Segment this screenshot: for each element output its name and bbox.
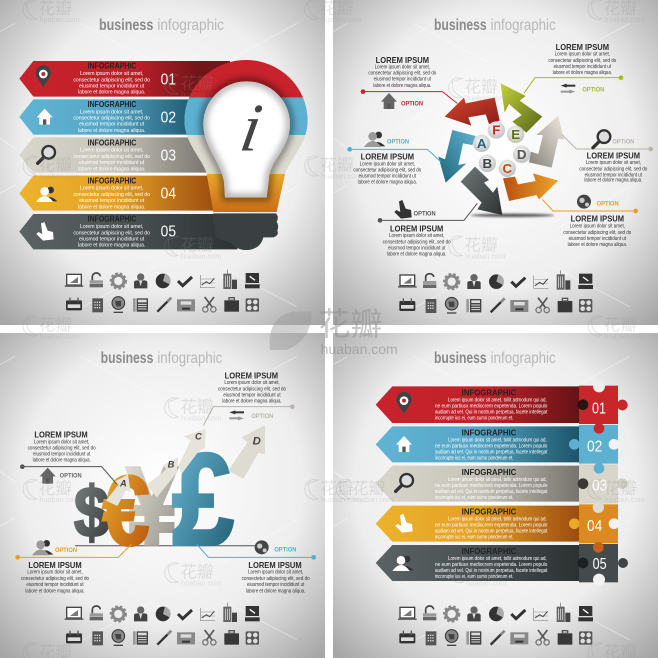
- callout: lower left dark: [378, 200, 477, 258]
- banner 02 blue: incorrupte ius ei, eum sumo ponderum et.: [435, 456, 514, 462]
- callout: top: eiusmod tempor incididunt ut: [223, 392, 281, 398]
- letter balls: C: [503, 161, 513, 176]
- callout: top right green: labore et dolore magna aliqua.: [553, 70, 612, 76]
- callout: lower left dark: LOREM IPSUM: [390, 223, 443, 233]
- callout: lower left: LOREM IPSUM: [28, 560, 82, 570]
- callout: top right green: LOREM IPSUM: [556, 42, 609, 52]
- callout: lower right orange: eiusmod tempor incididunt ut: [569, 236, 626, 242]
- callout: mid left blue: eiusmod tempor incididunt ut: [359, 174, 416, 180]
- callout: left: labore et dolore magna aliqua.: [33, 458, 91, 464]
- panel: currency symbols: [0, 333, 325, 658]
- watermark: centre: [270, 306, 398, 357]
- callout: lower right orange: OPTION: [597, 201, 619, 208]
- callout: lower left: consectetur adipiscing elit, sed do: [21, 576, 89, 582]
- callout: mid right cream: LOREM IPSUM: [587, 150, 640, 160]
- banner 03 grey: INFOGRAPHIC: [462, 468, 517, 477]
- callout: top right green: eiusmod tempor incididunt ut: [554, 64, 611, 70]
- callout: lower right orange: consectetur adipiscing elit, sed do: [563, 230, 631, 236]
- banner 05 dark: labore et dolore magna aliqua.: [78, 243, 146, 249]
- light bulb: [180, 57, 313, 250]
- banner 02 blue: [376, 426, 579, 462]
- callout: lower right: Lorem ipsum dolor sit amet,: [248, 570, 304, 576]
- banner 02 blue: [19, 99, 200, 135]
- watermark: centre: 花瓣: [318, 306, 382, 342]
- callout: lower left dark: eiusmod tempor incididunt ut: [388, 245, 446, 251]
- callout: left: eiusmod tempor incididunt ut: [33, 452, 91, 458]
- banner 05 dark: consectetur adipiscing elit, sed do: [73, 230, 150, 236]
- callout: lower left dark: OPTION: [414, 210, 436, 217]
- puzzle piece 03: [578, 463, 628, 504]
- callout: mid left blue: Lorem ipsum dolor sit amet,: [360, 161, 415, 167]
- panel: puzzle banners: [333, 333, 658, 658]
- icon rows: [65, 270, 260, 313]
- callout: lower left dark: consectetur adipiscing elit, sed do: [383, 239, 451, 245]
- callout: lower right: LOREM IPSUM: [248, 560, 302, 570]
- arrow D: D: [253, 435, 261, 447]
- banner 03 grey: incorrupte ius ei, eum sumo ponderum et.: [435, 495, 514, 501]
- banner 02 blue: eiusmod tempor incididunt ut: [79, 122, 145, 128]
- banner 05 dark: Lorem ipsum dolor sit amet,: [80, 224, 144, 230]
- callout: top: Lorem ipsum dolor sit amet,: [224, 380, 280, 386]
- currency: dollar: $: [74, 472, 109, 552]
- puzzle piece 04: 04: [587, 518, 602, 535]
- callout: left: [20, 430, 117, 484]
- callout: top right green: OPTION: [582, 86, 604, 93]
- banner 03 grey: labore et dolore magna aliqua.: [78, 166, 146, 172]
- callout: top: consectetur adipiscing elit, sed do: [218, 386, 286, 392]
- banner 02 blue: consectetur adipiscing elit, sed do: [73, 116, 150, 122]
- callout: top left red: labore et dolore magna aliqua.: [373, 83, 432, 89]
- banner 04 orange: incorrupte ius ei, eum sumo ponderum et.: [435, 535, 514, 541]
- callout: top left red: eiusmod tempor incididunt ut: [374, 77, 431, 83]
- title: infographic: [491, 17, 556, 34]
- callout: lower right: consectetur adipiscing elit, sed do: [242, 576, 310, 582]
- callout: lower right orange: Lorem ipsum dolor sit amet,: [570, 224, 625, 230]
- puzzle piece 01: 01: [592, 401, 606, 418]
- callout: top left red: LOREM IPSUM: [376, 55, 429, 65]
- banner 05 dark: INFOGRAPHIC: [88, 215, 137, 224]
- ground line: [75, 545, 255, 546]
- puzzle piece 05: 05: [593, 556, 607, 573]
- banner 01 red: incorrupte ius ei, eum sumo ponderum et.: [435, 416, 514, 422]
- banner 02 blue: audiam ad vel. Qui in nostrum perpetua, facete intellegat: [435, 450, 548, 456]
- panel: arrow swirl: [333, 0, 658, 325]
- callout: lower left: labore et dolore magna aliqua.: [25, 588, 85, 594]
- title: infographic: [157, 17, 224, 34]
- banner 04 orange: 04: [161, 186, 176, 203]
- banner 02 blue: labore et dolore magna aliqua.: [78, 128, 146, 134]
- currency: pound: £: [172, 426, 234, 572]
- banner 04 orange: Lorem ipsum dolor sit amet, tollit admodum qui ad,: [448, 517, 547, 523]
- callout: mid left blue: OPTION: [387, 138, 409, 145]
- callout: lower left: Lorem ipsum dolor sit amet,: [27, 570, 83, 576]
- callout: top left red: Lorem ipsum dolor sit amet,: [375, 64, 430, 70]
- callout: mid right cream: eiusmod tempor incididunt ut: [585, 172, 642, 178]
- letter balls: D: [517, 147, 527, 162]
- watermark: centre: huaban.com: [321, 341, 398, 357]
- banner 05 dark: eiusmod tempor incididunt ut: [79, 236, 145, 242]
- letter balls: F: [492, 123, 500, 138]
- callout: top: [203, 371, 295, 426]
- banner 01 red: 01: [161, 71, 176, 88]
- letter balls: E: [511, 127, 520, 142]
- banner 04 orange: ne eum partiusx mediocrem expetenda. Lorem populo: [435, 523, 547, 529]
- currency: euro: €: [103, 455, 149, 565]
- puzzle piece 05: [578, 542, 628, 586]
- banner 01 red: Lorem ipsum dolor sit amet, tollit admodum qui ad,: [448, 398, 547, 404]
- banner 01 red: INFOGRAPHIC: [462, 389, 517, 398]
- callout: top: OPTION: [251, 413, 273, 420]
- puzzle piece 02: 02: [587, 438, 602, 455]
- arrow: green: [501, 83, 542, 133]
- callout: top left red: OPTION: [401, 100, 423, 107]
- banner 05 dark: ne eum partiusx mediocrem expetenda. Lorem populo: [435, 562, 547, 568]
- callout: top right green: Lorem ipsum dolor sit amet,: [555, 52, 610, 58]
- arrow B: [147, 457, 178, 497]
- callout: mid right cream: Lorem ipsum dolor sit amet,: [586, 160, 641, 166]
- puzzle piece 03: 03: [592, 478, 607, 495]
- arrow: blue: [438, 130, 476, 183]
- icon rows: [398, 270, 593, 314]
- banner 04 orange: eiusmod tempor incididunt ut: [79, 198, 145, 204]
- banner 03 grey: Lorem ipsum dolor sit amet,: [80, 148, 144, 154]
- banner 04 orange: consectetur adipiscing elit, sed do: [73, 192, 150, 198]
- banner 01 red: [19, 61, 230, 97]
- banner 03 grey: [376, 466, 579, 502]
- banner 01 red: ne eum partiusx mediocrem expetenda. Lorem populo: [435, 404, 547, 410]
- callout: mid left blue: LOREM IPSUM: [361, 152, 414, 162]
- callout: lower left: [15, 540, 132, 594]
- currency: yen: ¥: [126, 443, 178, 568]
- callout: left: LOREM IPSUM: [34, 430, 88, 440]
- callout: mid left blue: consectetur adipiscing elit, sed do: [353, 168, 421, 174]
- banner 04 orange: audiam ad vel. Qui in nostrum perpetua, facete intellegat: [435, 529, 548, 535]
- banner 05 dark: 05: [161, 224, 176, 241]
- banner 04 orange: INFOGRAPHIC: [462, 508, 517, 517]
- letter balls: [473, 121, 530, 177]
- banner 02 blue: INFOGRAPHIC: [462, 429, 517, 438]
- banner 02 blue: Lorem ipsum dolor sit amet,: [80, 109, 144, 115]
- callout: mid right cream: [562, 130, 653, 184]
- banner 01 red: labore et dolore magna aliqua.: [78, 90, 146, 96]
- banner 03 grey: Lorem ipsum dolor sit amet, tollit admodum qui ad,: [448, 477, 547, 483]
- callout: lower right: eiusmod tempor incididunt ut: [247, 582, 305, 588]
- banner 05 dark: audiam ad vel. Qui in nostrum perpetua, facete intellegat: [435, 568, 548, 574]
- callout: lower left: OPTION: [55, 547, 77, 554]
- banner 05 dark: INFOGRAPHIC: [462, 547, 517, 556]
- callout: top right green: consectetur adipiscing elit, sed do: [548, 58, 616, 64]
- title: business: [99, 17, 153, 34]
- arrow A: A: [119, 478, 127, 488]
- banner 03 grey: consectetur adipiscing elit, sed do: [73, 154, 150, 160]
- banner 02 blue: Lorem ipsum dolor sit amet, tollit admodum qui ad,: [448, 438, 547, 444]
- banner 01 red: Lorem ipsum dolor sit amet,: [80, 71, 144, 77]
- banner 03 grey: INFOGRAPHIC: [88, 138, 137, 147]
- banner 01 red: INFOGRAPHIC: [88, 62, 137, 71]
- banner 01 red: consectetur adipiscing elit, sed do: [73, 77, 150, 83]
- banner 05 dark: incorrupte ius ei, eum sumo ponderum et.: [435, 574, 514, 580]
- ground shadow: [471, 214, 554, 217]
- arrow: red: [445, 98, 500, 126]
- arrow B: B: [168, 460, 175, 470]
- banner 03 grey: 03: [161, 147, 176, 164]
- arrow A: [106, 474, 131, 506]
- banner 02 blue: 02: [161, 109, 176, 126]
- callout: top: labore et dolore magna aliqua.: [222, 399, 282, 405]
- callout: left: OPTION: [60, 473, 82, 480]
- callout: top: LOREM IPSUM: [225, 371, 278, 381]
- callout: top left red: [361, 55, 457, 109]
- title: infographic: [157, 350, 223, 367]
- callout: lower left dark: labore et dolore magna aliqua.: [387, 252, 447, 258]
- callout: lower right orange: [542, 195, 638, 248]
- callout: lower right: labore et dolore magna aliqua.: [246, 588, 306, 594]
- title: business: [434, 17, 487, 34]
- banner 05 dark: Lorem ipsum dolor sit amet, tollit admodum qui ad,: [448, 556, 547, 562]
- banner 02 blue: ne eum partiusx mediocrem expetenda. Lorem populo: [435, 444, 547, 450]
- panel: light bulb banners: [0, 0, 325, 325]
- callout: lower right orange: labore et dolore magna aliqua.: [568, 242, 627, 248]
- callout: left: consectetur adipiscing elit, sed do: [28, 445, 96, 451]
- puzzle piece 04: [569, 502, 619, 543]
- callout: top left red: consectetur adipiscing elit, sed do: [368, 71, 436, 77]
- callout: top right green: [524, 42, 623, 94]
- banner 04 orange: [376, 506, 579, 542]
- banner 04 orange: labore et dolore magna aliqua.: [78, 204, 146, 210]
- banner 04 orange: INFOGRAPHIC: [88, 176, 137, 185]
- icon rows: [65, 603, 260, 646]
- arrow C: C: [195, 432, 202, 442]
- callout: mid right cream: OPTION: [612, 138, 634, 145]
- title: business: [101, 350, 153, 367]
- arrow C: [178, 429, 206, 474]
- banner 01 red: [376, 386, 579, 423]
- banner 05 dark: [19, 214, 237, 249]
- banner 02 blue: INFOGRAPHIC: [88, 100, 137, 109]
- banner 05 dark: [376, 545, 579, 581]
- callout: left: Lorem ipsum dolor sit amet,: [34, 439, 90, 445]
- puzzle piece 02: [569, 423, 619, 464]
- title: business: [434, 350, 487, 367]
- icon rows: [398, 603, 593, 646]
- callout: mid left blue: labore et dolore magna aliqua.: [358, 180, 417, 186]
- banner 04 orange: Lorem ipsum dolor sit amet,: [80, 186, 144, 192]
- banner 01 red: eiusmod tempor incididunt ut: [79, 83, 145, 89]
- banner 01 red: audiam ad vel. Qui in nostrum perpetua, facete intellegat: [435, 410, 548, 416]
- arrow: orange: [503, 173, 558, 201]
- letter balls: B: [483, 156, 493, 171]
- callout: lower right: [197, 540, 316, 594]
- callout: lower right orange: LOREM IPSUM: [571, 214, 624, 224]
- callout: lower left: eiusmod tempor incididunt ut: [26, 582, 84, 588]
- banner 03 grey: ne eum partiusx mediocrem expetenda. Lorem populo: [435, 483, 547, 489]
- arrow: dark: [461, 167, 502, 215]
- banner 04 orange: [19, 176, 217, 211]
- letter balls: A: [477, 136, 487, 151]
- callout: lower right: OPTION: [274, 547, 296, 554]
- banner 03 grey: [19, 137, 210, 173]
- callout: lower left dark: Lorem ipsum dolor sit amet,: [389, 233, 445, 239]
- banner 03 grey: eiusmod tempor incididunt ut: [79, 160, 145, 166]
- arrow D: [228, 425, 265, 479]
- arrow: cream: [529, 116, 564, 168]
- banner 03 grey: audiam ad vel. Qui in nostrum perpetua, facete intellegat: [435, 489, 548, 495]
- callout: mid left blue: [347, 132, 441, 186]
- title: infographic: [491, 350, 556, 367]
- info letter i: i: [235, 90, 268, 166]
- puzzle piece 01: [578, 380, 628, 424]
